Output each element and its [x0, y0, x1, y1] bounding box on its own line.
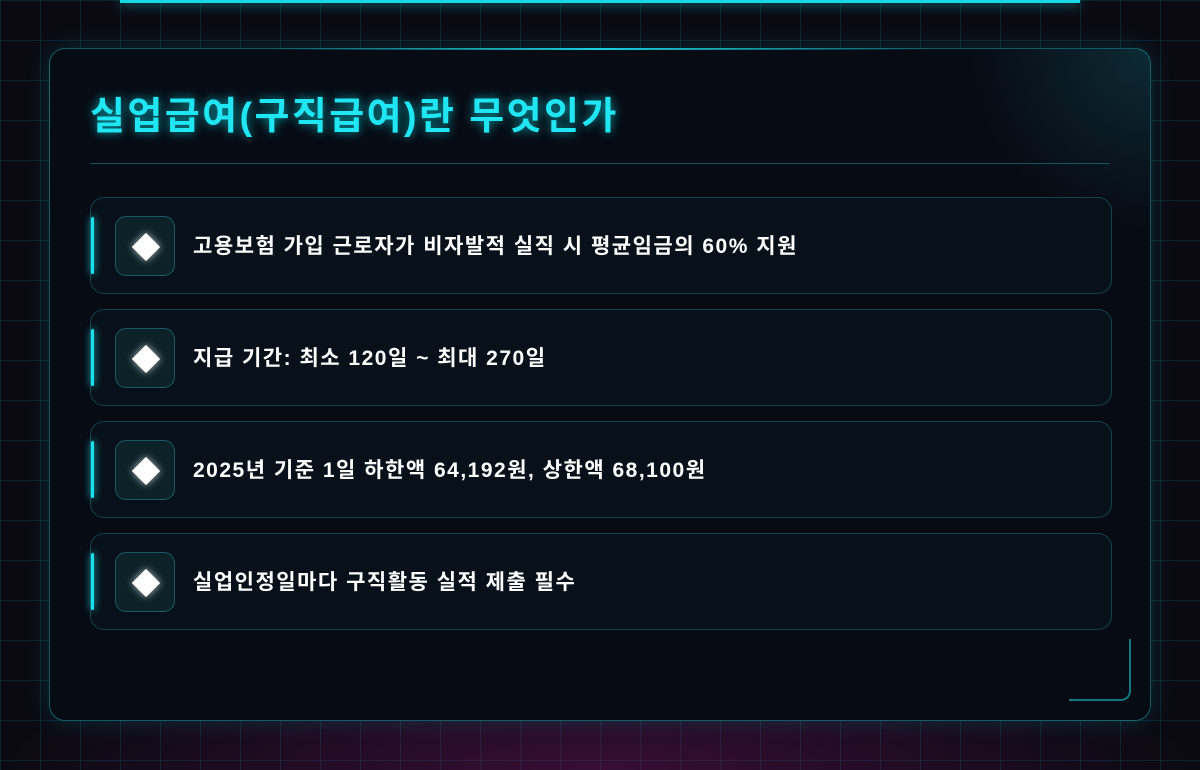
item 2 — [90, 309, 1112, 406]
item 3: 2025년 기준 1일 하한액 64,192원, 상한액 68,100원 — [193, 459, 707, 482]
item 2: 지급 기간: 최소 120일 ~ 최대 270일 — [193, 347, 547, 370]
title: 실업급여(구직급여)란 무엇인가 — [90, 96, 619, 138]
corner accent — [1069, 639, 1131, 701]
item 1: 고용보험 가입 근로자가 비자발적 실직 시 평균임금의 60% 지원 — [193, 235, 798, 258]
item 4: 실업인정일마다 구직활동 실적 제출 필수 — [193, 571, 576, 594]
item 4 — [90, 533, 1112, 630]
item 3 — [90, 421, 1112, 518]
item 1 — [90, 197, 1112, 294]
